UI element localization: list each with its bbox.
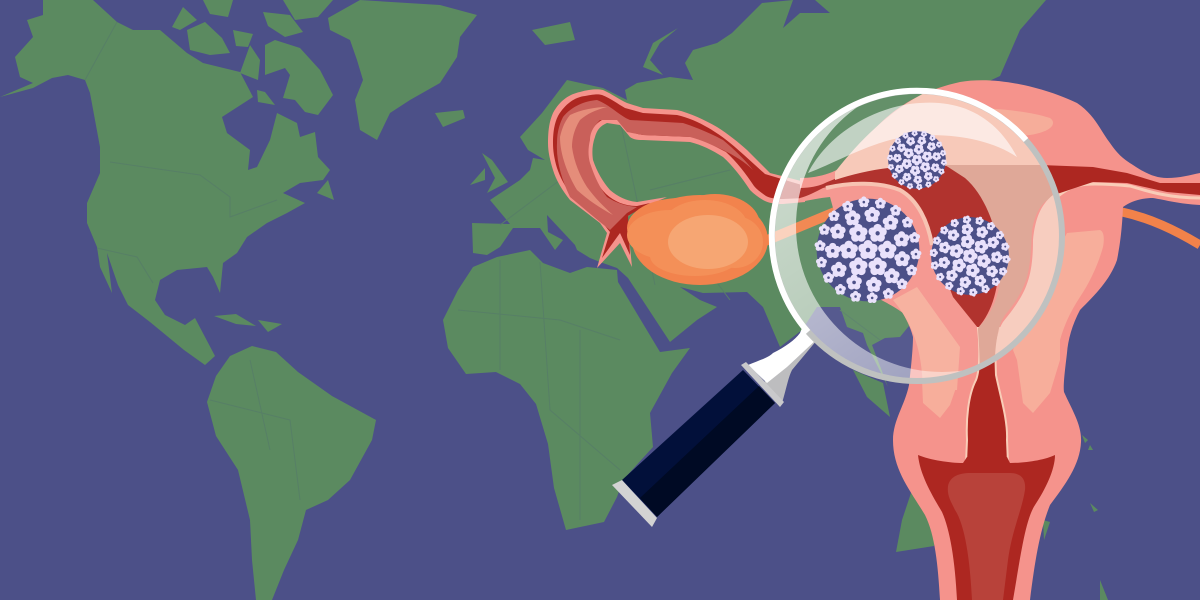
tube highlight — [560, 107, 613, 215]
Caribbean islands — [214, 314, 282, 332]
Greenland — [328, 0, 477, 140]
ovary mid lobes — [627, 200, 763, 276]
right fallopian tube lumen — [1040, 165, 1200, 197]
tube dark lining — [553, 94, 805, 258]
South America — [207, 346, 376, 600]
pale band over left wall — [826, 184, 932, 245]
upper pale zone — [835, 94, 1040, 180]
Arctic islands — [172, 0, 333, 105]
highlight crescent — [808, 103, 1017, 173]
virus large — [815, 196, 921, 303]
left fallopian tube — [548, 89, 805, 268]
wall inner lower left — [922, 380, 957, 418]
lens rim white — [772, 91, 1026, 332]
virus top — [875, 118, 959, 202]
Eurasia — [472, 0, 1046, 387]
handle body — [622, 370, 775, 517]
cervical canal — [966, 328, 1008, 463]
wall inner right — [1013, 230, 1104, 413]
Novaya Zemlya — [643, 28, 678, 75]
cream line right — [1058, 184, 1200, 198]
uterus outer body — [800, 80, 1200, 600]
map borders — [85, 22, 880, 520]
fundus highlight — [915, 108, 1053, 137]
North America — [0, 0, 330, 365]
Svalbard — [532, 22, 575, 45]
handle shade — [640, 386, 775, 517]
virus right — [918, 204, 1022, 308]
tube inner muscle — [557, 100, 753, 230]
vaginal canal — [918, 455, 1055, 600]
ovary outer — [627, 194, 768, 285]
orange ligament left — [758, 212, 835, 244]
magnifying lens — [768, 88, 1065, 384]
magnifying glass handle — [612, 328, 817, 527]
collar ring — [741, 362, 784, 407]
uterine cavity — [800, 165, 999, 328]
lens rim grey — [772, 91, 1062, 381]
vaginal inner wall — [948, 473, 1025, 600]
glass tint — [796, 94, 997, 368]
Pacific islands — [1082, 435, 1108, 600]
tube outer wall — [548, 89, 805, 268]
Baffin Island — [265, 40, 333, 115]
end cap — [612, 480, 657, 527]
collar grey side — [762, 340, 817, 403]
United Kingdom and Ireland — [470, 153, 508, 193]
tinted wall right — [946, 165, 1053, 364]
Australia — [896, 490, 1050, 552]
lens interior — [775, 94, 1059, 378]
ovary light lobes — [668, 215, 748, 269]
orange ligament right — [1122, 212, 1200, 245]
Sumatra — [853, 370, 890, 417]
wall inner upper left — [893, 287, 960, 390]
ovary — [627, 194, 768, 285]
Newfoundland — [317, 180, 334, 200]
rim crescent — [775, 107, 962, 378]
Iceland — [435, 110, 465, 127]
Africa — [443, 250, 690, 530]
collar white side — [748, 328, 817, 383]
pale wall right — [995, 195, 1059, 354]
